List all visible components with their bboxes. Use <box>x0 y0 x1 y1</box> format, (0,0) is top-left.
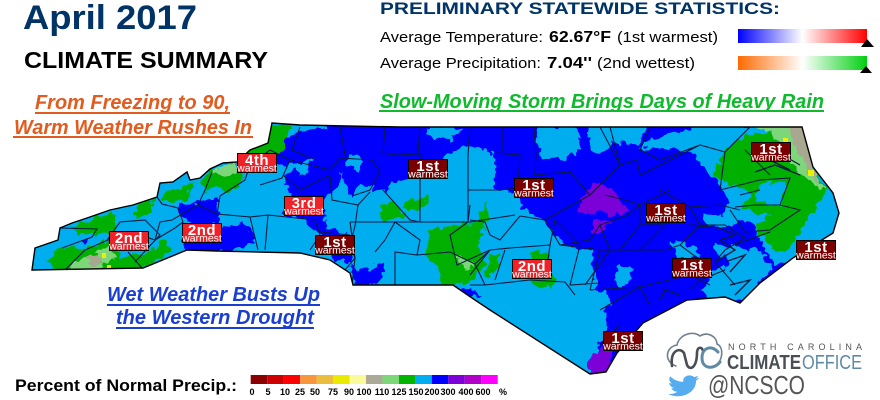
label: 1st warmest: 1st <box>804 239 828 256</box>
label: 1st warmest: 1st <box>680 257 704 274</box>
precipitation statistic: Average Precipitation: <box>380 55 541 72</box>
climate office wordmark: CLIMATE <box>727 352 801 374</box>
precipitation statistic: (2nd wettest) <box>597 55 695 72</box>
climate office wordmark <box>727 342 862 374</box>
precipitation statistic: 7.04'' <box>547 55 592 72</box>
label: 1st warmest <box>671 257 712 280</box>
precipitation legend: 150 <box>408 387 424 397</box>
label: 1st warmest: warmest <box>645 212 686 224</box>
label: 3rd warmest: warmest <box>283 206 324 218</box>
label: 1st warmest: warmest <box>750 152 791 164</box>
county lines <box>60 127 800 345</box>
legend title: Percent of Normal Precip.: <box>15 376 237 395</box>
precipitation legend: % <box>499 387 507 397</box>
temperature rank bar <box>738 29 874 47</box>
label: 1st warmest: warmest <box>671 268 712 280</box>
label: 2nd warmest: warmest <box>181 232 222 244</box>
precipitation legend <box>249 375 507 397</box>
label: 3rd warmest: 3rd <box>292 195 316 212</box>
precipitation map of North Carolina <box>31 122 840 375</box>
precipitation legend: 300 <box>440 387 456 397</box>
climate office wordmark: NORTH CAROLINA <box>728 342 862 352</box>
heading: western drought <box>107 284 320 329</box>
heading: warm weather <box>13 92 253 139</box>
label: 1st warmest <box>645 202 686 224</box>
label: 1st warmest: 1st <box>654 202 678 219</box>
label: 1st warmest: warmest <box>602 340 643 352</box>
green: mountains <box>248 124 292 154</box>
blue: western piedmont patches <box>270 125 350 264</box>
label: 2nd warmest: 2nd <box>188 222 216 239</box>
label: 1st warmest <box>750 141 791 164</box>
label: 2nd warmest <box>181 222 222 244</box>
precipitation legend: 100 <box>356 387 372 397</box>
precipitation legend: 600 <box>475 387 491 397</box>
heading: western drought: Wet Weather Busts Up <box>107 284 320 306</box>
label: 1st warmest <box>314 234 355 256</box>
label: 2nd warmest <box>108 230 149 252</box>
label: 1st warmest: 1st <box>522 177 546 194</box>
temperature statistic: 62.67°F <box>549 29 611 46</box>
label: 1st warmest: warmest <box>513 188 554 200</box>
label: 1st warmest: warmest <box>314 244 355 256</box>
label: 1st warmest <box>602 330 643 352</box>
heading: heavy rain: Slow-Moving Storm Brings Days of Heavy Rain <box>380 91 824 113</box>
label: 4th warmest <box>236 152 277 174</box>
precipitation legend: 5 <box>265 387 271 397</box>
twitter handle: @NCSCO <box>708 370 805 400</box>
label: 2nd warmest: warmest <box>108 240 149 252</box>
light blue holes <box>536 126 578 160</box>
label: 1st warmest: 1st <box>416 158 440 175</box>
label: 1st warmest: 1st <box>323 234 347 251</box>
heading: warm weather: Warm Weather Rushes In <box>14 117 252 139</box>
precipitation legend: 110 <box>375 387 389 397</box>
purple core <box>580 182 628 217</box>
green: central piedmont <box>378 202 405 222</box>
label: 2nd warmest: 2nd <box>115 230 143 247</box>
state outline <box>32 123 839 374</box>
precipitation legend: 0 <box>249 387 255 397</box>
subtitle: CLIMATE SUMMARY <box>24 47 268 73</box>
light green <box>456 255 476 270</box>
precipitation statistic <box>380 55 695 72</box>
precipitation legend: 10 <box>280 387 290 397</box>
precipitation legend: 125 <box>391 387 407 397</box>
temperature statistic: (1st warmest) <box>617 29 718 46</box>
heading: warm weather: From Freezing to 90, <box>35 92 230 114</box>
label: 2nd warmest <box>511 258 552 280</box>
icon: twitter bird <box>668 375 699 396</box>
label: 1st warmest <box>407 158 448 180</box>
label: 3rd warmest <box>283 195 324 218</box>
heading: western drought: the Western Drought <box>116 307 315 329</box>
temperature statistic <box>380 29 718 46</box>
precipitation rank bar <box>738 56 872 73</box>
label: 1st warmest <box>513 177 554 200</box>
precipitation legend: 90 <box>344 387 354 397</box>
precipitation legend: 25 <box>295 387 305 397</box>
label: 1st warmest <box>795 239 836 262</box>
label: 2nd warmest: 2nd <box>518 258 546 275</box>
blue: north-central and east <box>330 126 786 367</box>
label: 1st warmest: warmest <box>407 168 448 180</box>
label: 1st warmest: 1st <box>611 330 635 347</box>
label: 4th warmest: warmest <box>236 162 277 174</box>
precipitation legend: 75 <box>328 387 338 397</box>
label: 2nd warmest: warmest <box>511 268 552 280</box>
icon: climate office cloud logo <box>667 333 722 368</box>
precipitation legend: 200 <box>424 387 440 397</box>
label: 1st warmest: warmest <box>795 250 836 262</box>
precipitation legend: 50 <box>310 387 320 397</box>
precipitation legend: 400 <box>458 387 474 397</box>
label: 1st warmest: 1st <box>759 141 783 158</box>
title: April 2017 <box>23 0 197 37</box>
temperature statistic: Average Temperature: <box>380 29 543 46</box>
green: north-east <box>713 132 827 252</box>
label: 4th warmest: 4th <box>245 152 269 169</box>
climate office wordmark: OFFICE <box>802 352 862 374</box>
